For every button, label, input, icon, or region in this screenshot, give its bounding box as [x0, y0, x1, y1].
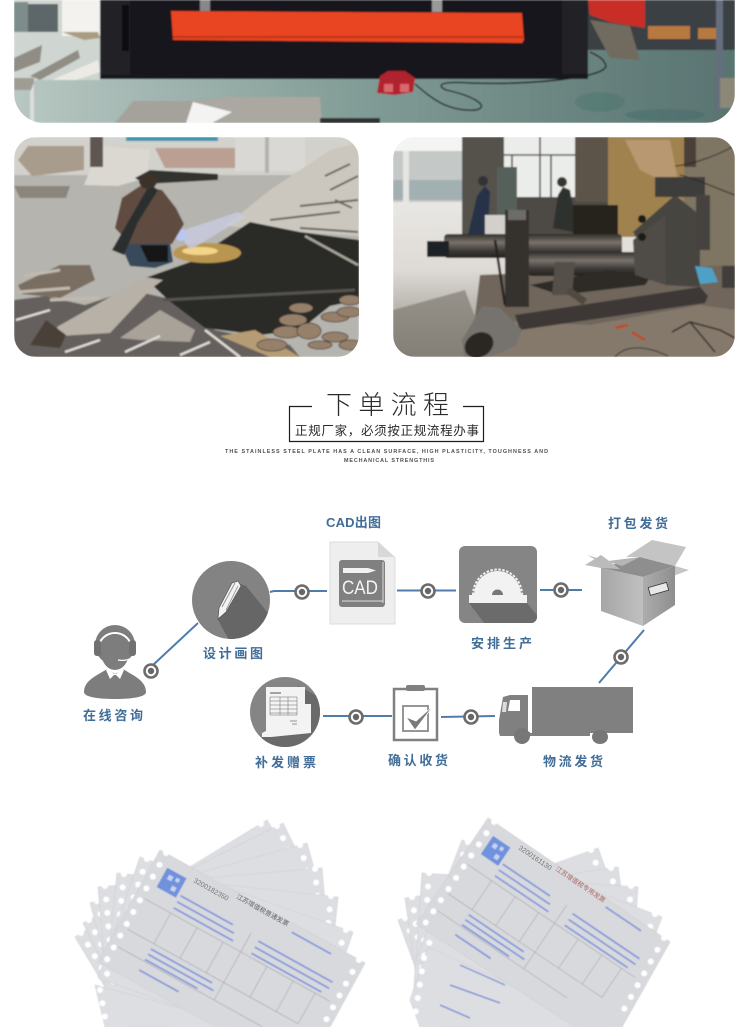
icon: clipboard check — [394, 685, 437, 740]
label: packing and shipping: 打包发货 — [608, 516, 668, 531]
label: design drawing: 设计画图 — [203, 646, 263, 661]
icon: delivery truck — [499, 687, 633, 744]
english caption: THE STAINLESS STEEL PLATE HAS A CLEAN SURFACE, HIGH PLASTICITY, TOUGHNESS AND — [225, 449, 548, 455]
english caption: MECHANICAL STRENGTHIS — [344, 458, 434, 464]
label: CAD output: CAD出图 — [326, 515, 381, 530]
connector nodes — [144, 584, 628, 724]
label: logistics dispatch: 物流发货 — [543, 754, 603, 769]
photo: press brake machine — [14, 0, 735, 123]
icon: CAD file — [330, 542, 395, 624]
title: 下单流程 — [326, 390, 449, 420]
label: confirm receipt: 确认收货 — [388, 753, 448, 768]
invoice number: 3200161130 — [517, 845, 553, 872]
subtitle: 正规厂家，必须按正规流程办事 — [295, 423, 479, 438]
title bracket — [290, 406, 484, 442]
photo: worker flame-cutting steel — [14, 137, 363, 357]
process flow diagram — [83, 515, 689, 770]
heading: order process — [225, 390, 548, 464]
icon: invoice circle — [250, 677, 320, 747]
photo: steel rolling machine with workers — [393, 137, 735, 363]
icon: customer service agent — [84, 625, 146, 699]
connector lines — [153, 590, 644, 717]
invoice fan: left — [75, 820, 365, 1027]
icon: CAD file: CAD — [342, 578, 378, 599]
icon: cardboard box — [585, 540, 689, 626]
english caption — [225, 449, 548, 464]
icon: saw blade production — [459, 546, 537, 623]
label: reissue invoice: 补发赠票 — [255, 755, 316, 770]
invoice heading: 江苏增值税专用发票 — [554, 864, 608, 905]
icon: design pen circle — [192, 561, 270, 639]
invoice fan: right — [398, 818, 670, 1027]
label: online consultation: 在线咨询 — [83, 708, 143, 723]
invoice number: 3200182350 — [192, 878, 230, 903]
invoice heading: 江苏增值税普通发票 — [235, 892, 291, 928]
label: arrange production: 安排生产 — [471, 636, 532, 651]
